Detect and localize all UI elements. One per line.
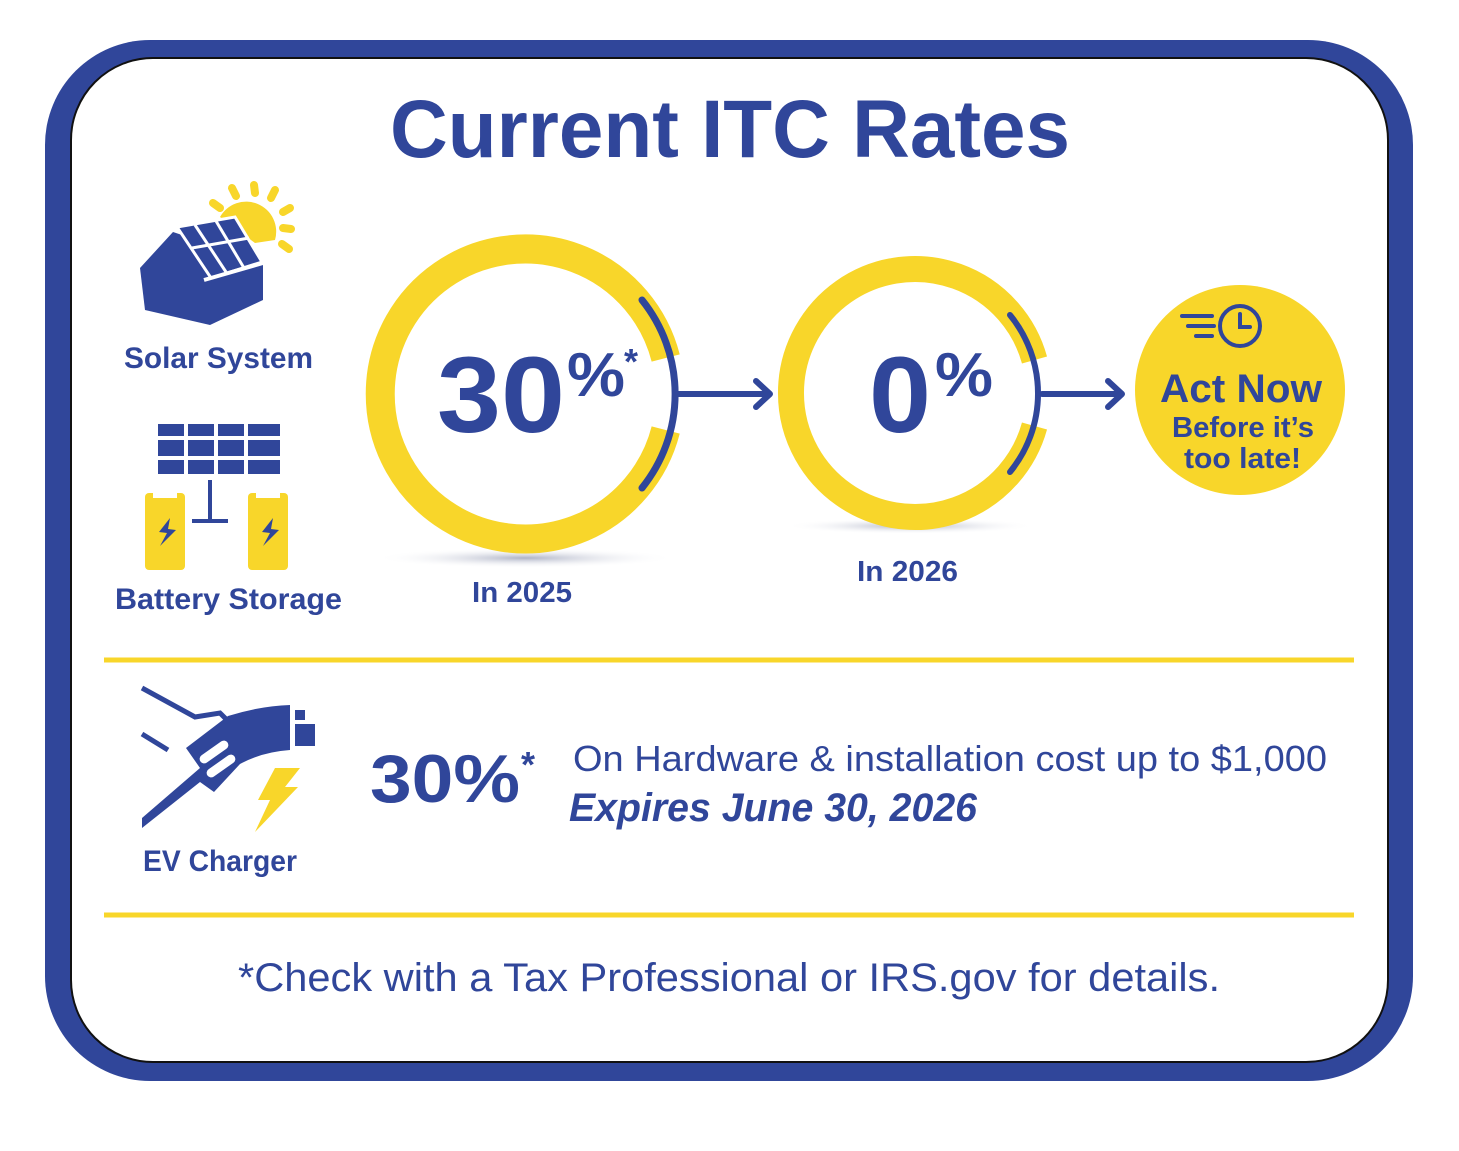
chart: 2025 ring: *: [624, 341, 638, 382]
chart: 2025 ring: 30: [437, 334, 565, 455]
label: in 2026: In 2026: [857, 556, 958, 588]
label: in 2025: In 2025: [472, 577, 572, 609]
callout: act now: Before it’s: [1172, 412, 1314, 444]
title: Current ITC Rates: [390, 84, 1070, 175]
label: battery storage: Battery Storage: [115, 583, 342, 616]
chart: 2026 ring: [785, 269, 1038, 534]
ev rate: 30%: [370, 741, 520, 817]
icon: ev charger: [142, 688, 315, 832]
footer note: *Check with a Tax Professional or IRS.gov for details.: [238, 956, 1220, 1000]
chart: 2026 ring: %: [935, 341, 993, 410]
label: solar system: Solar System: [124, 342, 313, 375]
icon: battery storage: [145, 424, 288, 570]
text: ev details: Expires June 30, 2026: [569, 786, 978, 830]
callout: act now: Act Now: [1160, 367, 1323, 411]
chart: 2026 ring: 0: [869, 334, 931, 455]
chart: 2025 ring: %: [567, 341, 625, 410]
callout: act now: too late!: [1184, 443, 1301, 475]
callout: act now: [1135, 285, 1345, 495]
arrow 1: [676, 381, 770, 407]
text: ev details: [569, 738, 1327, 830]
chart: 2025 ring: [375, 249, 675, 568]
arrow 2: [1042, 381, 1122, 407]
ev rate: *: [521, 744, 535, 785]
text: ev details: On Hardware & installation cost up to $1,000: [573, 738, 1327, 779]
icon: solar house: [140, 185, 291, 325]
label: ev charger: EV Charger: [143, 845, 297, 878]
